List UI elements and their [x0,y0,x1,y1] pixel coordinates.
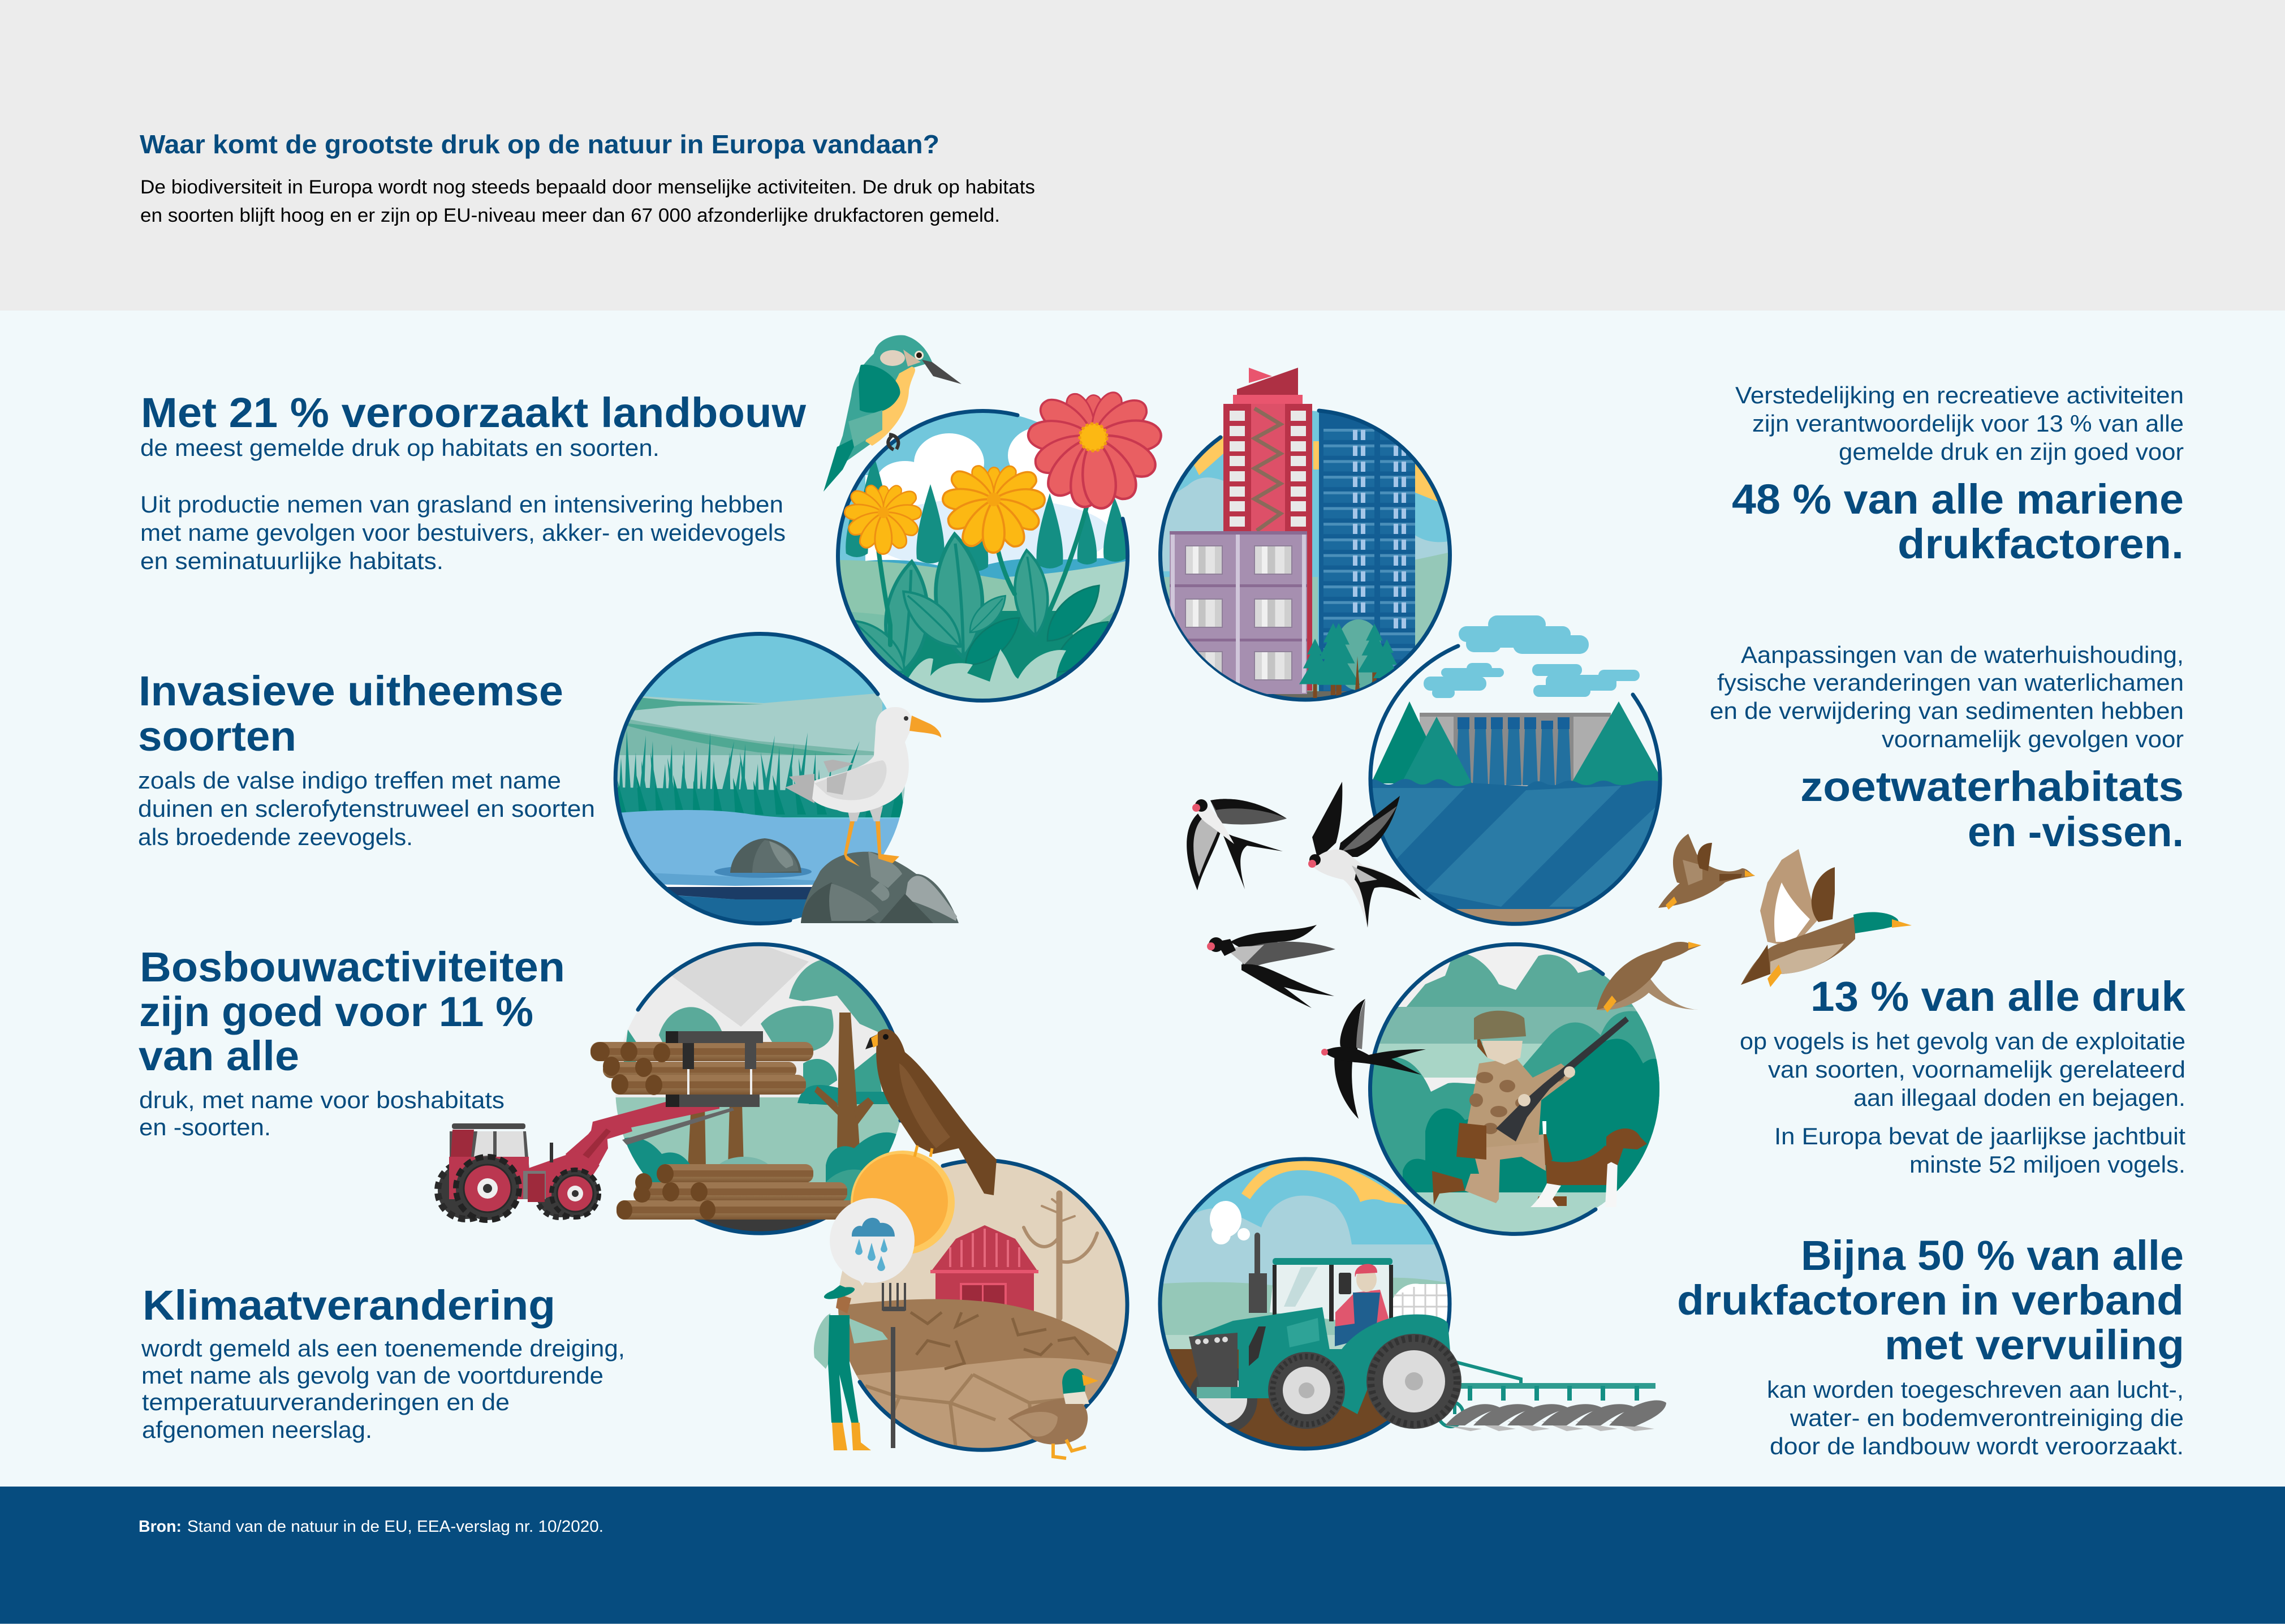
panel: climate circle [814,1151,1134,1459]
icon: kingfisher [824,335,962,492]
circle outline [1160,1159,1450,1449]
description: en seminatuurlijke habitats. [140,548,443,574]
text block: exploitation of species [1740,973,2186,1178]
heading: 13 % van alle druk [1810,973,2186,1020]
heading: Bosbouwactiviteiten [140,944,565,990]
icon: farmer with pitchfork [814,1283,905,1450]
heading: zijn goed voor 11 % [139,988,533,1035]
icon: green tractor [1189,1233,1461,1429]
purple building [1170,531,1307,694]
heading: Invasieve uitheemse [139,667,563,714]
panel: dam circle [1357,615,1674,933]
red tower [1223,368,1312,691]
icon: orange flower small [844,483,921,554]
footer band [0,1487,2285,1624]
description: druk, met name voor boshabitats [139,1087,505,1113]
header band [0,0,2285,311]
icon: red flower [1028,388,1162,510]
farmer driver [1335,1264,1389,1346]
icon: seagull [785,707,941,867]
reeds [614,730,899,817]
description: minste 52 miljoen vogels. [1909,1151,2185,1178]
description: Uit productie nemen van grasland en intensivering hebben [140,491,783,518]
arc outline [1370,646,1660,924]
heading [139,944,565,1079]
heading: drukfactoren. [1898,520,2184,567]
bushes [614,1132,908,1222]
big rock [801,851,959,923]
icon: eagle [865,1029,997,1195]
description: duinen en sclerofytenstruweel en soorten [138,795,595,822]
icon: plough [1437,1359,1666,1431]
description: en de verwijdering van sedimenten hebben [1710,697,2184,724]
description: als broedende zeevogels. [138,824,413,850]
icon: swallow 1 [1187,799,1287,890]
water [1372,779,1658,922]
plant leaves [855,531,1109,682]
description: Verstedelijking en recreatieve activiteiten [1735,382,2184,408]
description: van soorten, voornamelijk gerelateerd [1768,1056,2185,1083]
panel: seagull circle [611,628,959,928]
heading [1800,763,2184,855]
clouds [1424,615,1640,698]
text block: pollution [1677,1232,2184,1459]
cypress trees [846,455,1127,571]
heading: Klimaatverandering [143,1282,555,1329]
arc outline [1160,411,1450,700]
logs on ground [616,1164,865,1220]
description: op vogels is het gevolg van de exploitatie [1740,1028,2185,1054]
description [1735,382,2184,465]
icon: duck 3 flying [1597,942,1701,1013]
tree trunks [688,1013,874,1168]
text block: climate change [141,1282,625,1443]
description: fysische veranderingen van waterlichamen [1717,669,2184,696]
panel: hunting circle [1366,939,1669,1239]
heading [1732,476,2184,567]
icon: red forestry tractor [438,1123,611,1220]
heading: 48 % van alle mariene [1732,476,2184,523]
heading [1677,1232,2184,1368]
description [140,434,786,574]
arc outline [1370,944,1603,1234]
description: aan illegaal doden en bejagen. [1853,1084,2185,1111]
description: zijn verantwoordelijk voor 13 % van alle [1752,410,2184,437]
forest foliage [614,958,911,1227]
icon: mallard on ground [1008,1368,1098,1458]
arc outline [860,1160,1127,1450]
text block: agriculture [140,389,806,574]
description [139,1087,505,1140]
arc outline [838,411,1128,701]
dead tree [1024,1194,1097,1318]
description: de meest gemelde druk op habitats en soorten. [140,434,659,461]
loader arm [589,1102,734,1151]
icon: dog [1530,1121,1647,1207]
description: gemelde druk en zijn goed voor [1839,438,2184,465]
description: kan worden toegeschreven aan lucht-, [1767,1376,2184,1403]
cracked soil [831,1299,1131,1459]
source note: Stand van de natuur in de EU, EEA-verslag nr. 10/2020. [187,1518,603,1536]
arc outlines [638,944,904,1233]
panel: forestry circle [438,939,911,1239]
panel: urbanisation circle with buildings [1154,368,1456,709]
heading: en -vissen. [1968,808,2184,855]
description: temperatuurveranderingen en de [142,1389,510,1415]
text block: urbanisation [1732,382,2184,567]
description: en -soorten. [139,1114,271,1140]
icon: duck 2 mallard flying [1741,849,1912,987]
intro text [140,176,1035,226]
description: voornamelijk gevolgen voor [1882,726,2184,752]
icon: smoke [1210,1201,1250,1244]
panel: agriculture circle with flowers [824,335,1162,713]
text block: water management [1710,641,2184,855]
stems [878,484,1092,645]
intro text: De biodiversiteit in Europa wordt nog steeds bepaald door menselijke activiteiten. De druk op habitats [140,176,1035,198]
mountains [1371,701,1666,786]
description: water- en bodemverontreiniging die [1790,1405,2184,1431]
description: door de landbouw wordt veroorzaakt. [1770,1433,2184,1459]
heading: drukfactoren in verband [1677,1277,2184,1324]
heading: Met 21 % veroorzaakt landbouw [141,389,806,436]
description: wordt gemeld als een toenemende dreiging, [141,1335,625,1362]
description: met name als gevolg van de voortdurende [141,1362,603,1389]
heading [138,667,563,760]
icon: orange flower large [943,463,1045,553]
heading: van alle [139,1032,299,1079]
title: Waar komt de grootste druk op de natuur in Europa vandaan? [140,130,939,159]
water [622,810,899,921]
description [138,767,595,850]
description [1767,1376,2184,1459]
icon: speech bubble with rain cloud [830,1198,915,1286]
greenhouse [1391,1283,1454,1329]
description: Aanpassingen van de waterhuishouding, [1741,641,2184,668]
icon: sun [851,1151,955,1255]
heading: met vervuiling [1885,1321,2184,1368]
arc outline [615,634,878,924]
barn [930,1225,1038,1323]
description [1710,641,2184,752]
blue tower [1319,410,1415,709]
description: afgenomen neerslag. [142,1416,372,1443]
source note: Bron: [139,1518,182,1536]
description: In Europa bevat de jaarlijkse jachtbuit [1774,1123,2185,1149]
text block: forestry [139,944,565,1140]
description: met name gevolgen voor bestuivers, akker- en weidevogels [140,519,786,546]
small rock [730,838,801,873]
icon: hunter [1432,1011,1629,1206]
description [1740,1028,2185,1178]
heading: Bijna 50 % van alle [1801,1232,2184,1279]
logs held in grab [590,1031,813,1107]
icon: swallow 2 [1308,782,1421,928]
heading: zoetwaterhabitats [1800,763,2184,810]
panel: pollution circle with tractor [1154,1154,1666,1454]
description: zoals de valse indigo treffen met name [138,767,561,794]
icon: swallow 4 [1321,999,1426,1119]
dam wall [1420,713,1611,786]
icon: duck 1 flying [1658,834,1755,910]
intro text: en soorten blijft hoog en er zijn op EU-niveau meer dan 67 000 afzonderlijke drukfactoren gemeld. [140,205,1000,226]
trees [1299,619,1400,704]
text block: invasive species [138,667,595,850]
heading: soorten [138,713,296,760]
description [141,1335,625,1443]
icon: swallow 3 [1207,925,1335,1008]
